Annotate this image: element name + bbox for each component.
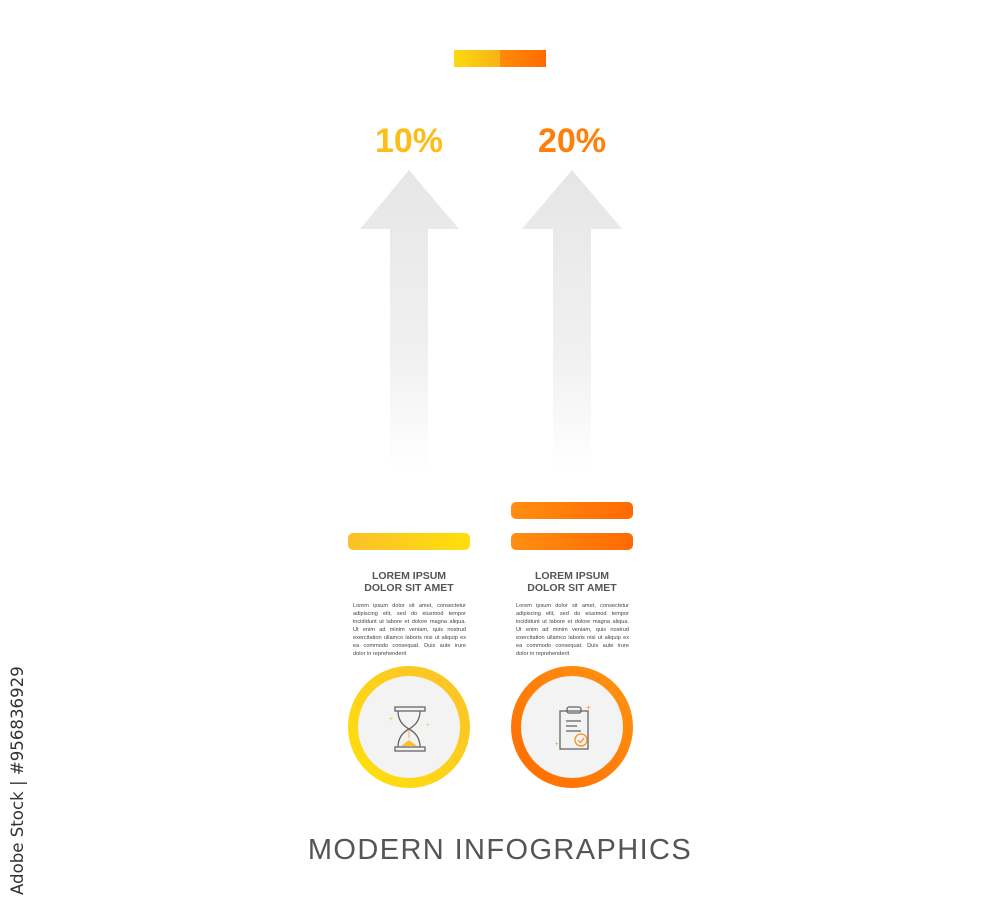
icon: hourglass: + xyxy=(389,716,393,723)
side credit text: Adobe Stock | #956836929 xyxy=(8,666,27,895)
circle right with clipboard xyxy=(511,666,633,788)
icon: clipboard xyxy=(555,703,591,750)
heading left: LOREM IPSUM xyxy=(372,570,446,582)
bar right bottom xyxy=(511,533,633,550)
icon: clipboard: + xyxy=(555,742,559,748)
arrow right xyxy=(522,170,622,470)
top legend bar xyxy=(454,50,546,67)
bar right top xyxy=(511,502,633,519)
body text right: Lorem ipsum dolor sit amet, consectetur adipiscing elit, sed do eiusmod tempor incididunt ut labore et dolore magna aliqua. Ut enim ad minim veniam, quis nostrud exercitation ullamco laboris nisi ut aliquip ex ea commodo consequat. Duis aute irure dolor in reprehenderit xyxy=(516,603,629,657)
percentage: 10%: 10% xyxy=(375,122,443,160)
icon: clipboard: + xyxy=(586,703,591,712)
heading left: DOLOR SIT AMET xyxy=(364,582,454,594)
icon: hourglass xyxy=(389,706,430,752)
heading right: LOREM IPSUM xyxy=(535,570,609,582)
bar left xyxy=(348,533,470,550)
percentage: 20%: 20% xyxy=(538,122,606,160)
circle left with hourglass xyxy=(348,666,470,788)
main title: MODERN INFOGRAPHICS xyxy=(308,834,692,866)
heading left xyxy=(364,570,454,594)
arrow left xyxy=(360,170,459,470)
heading right xyxy=(527,570,617,594)
body text left: Lorem ipsum dolor sit amet, consectetur adipiscing elit, sed do eiusmod tempor incididunt ut labore et dolore magna aliqua. Ut enim ad minim veniam, quis nostrud exercitation ullamco laboris nisi ut aliquip ex ea commodo consequat. Duis aute irure dolor in reprehenderit xyxy=(353,603,466,657)
heading right: DOLOR SIT AMET xyxy=(527,582,617,594)
icon: hourglass: + xyxy=(426,723,430,729)
